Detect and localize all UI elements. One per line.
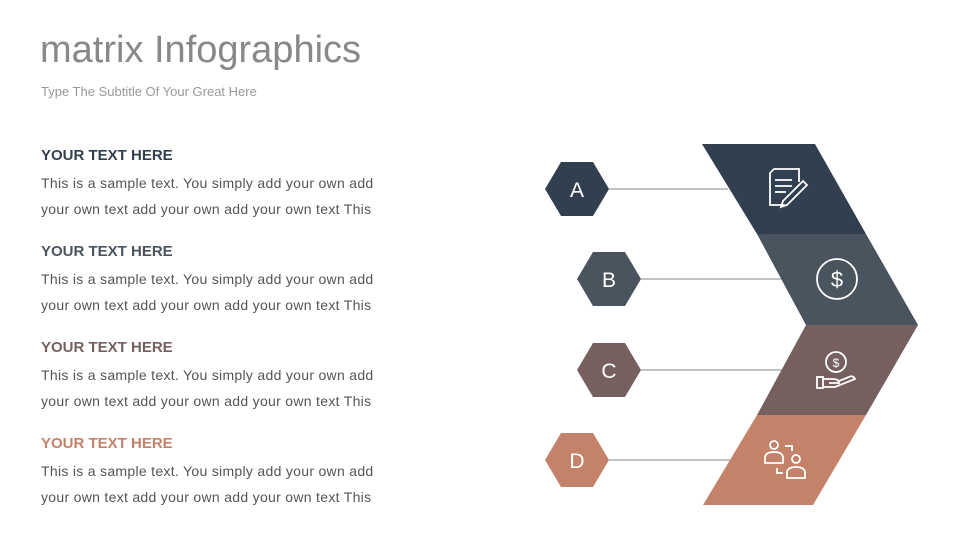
text block D	[41, 435, 374, 505]
title: matrix Infographics	[40, 29, 361, 71]
segment B: $	[831, 267, 843, 292]
hexagon B: B	[602, 269, 616, 292]
hexagon D	[545, 433, 609, 487]
icon: dollar coin	[817, 259, 857, 299]
text block B: This is a sample text. You simply add your own add your own text add your own add your own text This	[41, 271, 374, 313]
segment C	[757, 325, 918, 415]
segment A	[702, 144, 866, 234]
text block A	[41, 147, 374, 217]
icon: people exchange	[765, 441, 805, 478]
subtitle: Type The Subtitle Of Your Great Here	[41, 84, 257, 99]
hexagon A: A	[570, 179, 584, 202]
text block B: YOUR TEXT HERE	[41, 243, 173, 260]
text block D: YOUR TEXT HERE	[41, 435, 173, 452]
text block C: YOUR TEXT HERE	[41, 339, 173, 356]
text block B	[41, 243, 374, 313]
hexagon A	[545, 162, 609, 216]
text block C: This is a sample text. You simply add your own add your own text add your own add your own text This	[41, 367, 374, 409]
text block C	[41, 339, 374, 409]
text block A: This is a sample text. You simply add your own add your own text add your own add your own text This	[41, 175, 374, 217]
hexagon B	[577, 252, 641, 306]
text block D: This is a sample text. You simply add your own add your own text add your own add your own text This	[41, 463, 374, 505]
text block A: YOUR TEXT HERE	[41, 147, 173, 164]
icon: hand with coin	[817, 352, 855, 388]
segment D	[703, 415, 866, 505]
hexagon D: D	[569, 450, 585, 473]
hexagon C: C	[601, 360, 617, 383]
segment C: $	[833, 356, 840, 370]
segment B	[757, 234, 918, 325]
hexagon C	[577, 343, 641, 397]
icon: document pen	[770, 169, 807, 207]
